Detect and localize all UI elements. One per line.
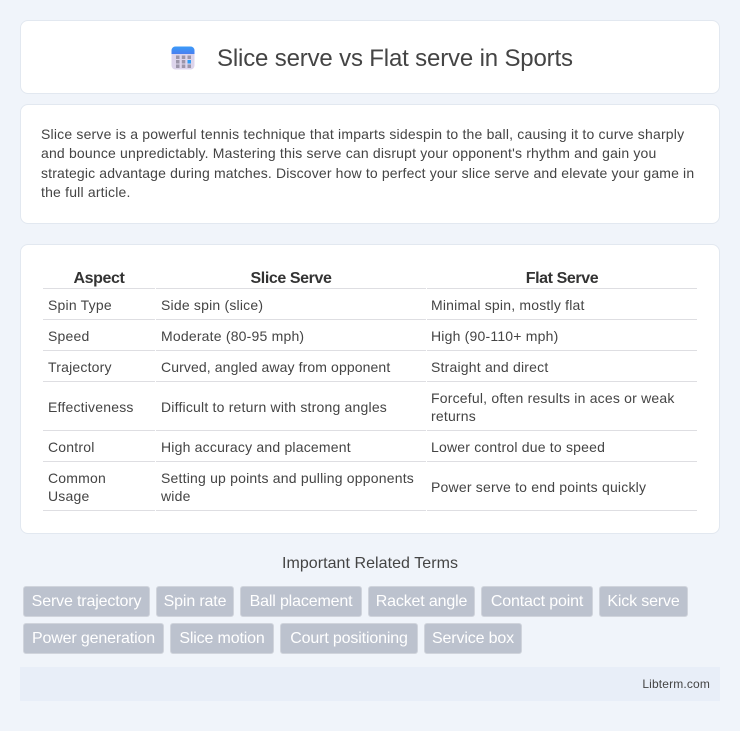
tags: related terms: Kick serve	[607, 593, 680, 610]
tags: related terms: Court positioning	[290, 630, 408, 647]
heading: related terms: Important Related Terms	[282, 555, 458, 572]
title: Slice serve vs Flat serve in Sports	[217, 45, 573, 72]
tags: related terms	[23, 586, 688, 654]
row: common usage: Power serve to end points quickly	[431, 479, 646, 495]
panel: comparison table	[20, 244, 720, 534]
row: spin type	[48, 297, 585, 313]
row: trajectory: Straight and direct	[431, 359, 548, 375]
panel: title card	[20, 20, 720, 94]
row: control: High accuracy and placement	[161, 439, 351, 455]
row: speed: High (90-110+ mph)	[431, 328, 558, 344]
row: control: Lower control due to speed	[431, 439, 605, 455]
tags: related terms: Ball placement	[250, 593, 352, 610]
row: common usage: wide	[161, 488, 191, 504]
row: control	[48, 439, 605, 455]
table header: Aspect	[74, 270, 124, 287]
table header: Flat Serve	[526, 270, 598, 287]
row: common usage: Setting up points and pulling opponents	[161, 470, 414, 486]
row: common usage	[48, 470, 646, 504]
row: spin type: Minimal spin, mostly flat	[431, 297, 585, 313]
row: speed: Speed	[48, 328, 89, 344]
intro paragraph: strategic advantage during matches. Discover how to perfect your slice serve and elevate your game in	[41, 165, 694, 181]
footer	[20, 667, 720, 701]
row: common usage: Common	[48, 470, 106, 486]
table header: Slice Serve	[250, 270, 332, 287]
row: effectiveness: returns	[431, 408, 476, 424]
row: trajectory: Curved, angled away from opponent	[161, 359, 390, 375]
tags: related terms: Slice motion	[179, 630, 265, 647]
row: control: Control	[48, 439, 95, 455]
tags: related terms: Spin rate	[164, 593, 226, 610]
intro paragraph: the full article.	[41, 184, 131, 200]
tags: related terms: Racket angle	[376, 593, 467, 610]
panel: intro text	[20, 104, 720, 224]
row: spin type: Spin Type	[48, 297, 112, 313]
intro paragraph	[41, 126, 694, 200]
footer credit: Libterm.com	[642, 677, 710, 691]
intro paragraph: Slice serve is a powerful tennis technique that imparts sidespin to the ball, causing it to curve sharply	[41, 126, 684, 142]
row: spin type: Side spin (slice)	[161, 297, 263, 313]
row: effectiveness: Difficult to return with strong angles	[161, 399, 387, 415]
row: trajectory	[48, 359, 548, 375]
row: common usage: Usage	[48, 488, 89, 504]
table header	[74, 270, 598, 287]
row: trajectory: Trajectory	[48, 359, 112, 375]
row: effectiveness	[48, 390, 675, 424]
row: effectiveness: Effectiveness	[48, 399, 134, 415]
tags: related terms: Power generation	[32, 630, 155, 647]
row: effectiveness: Forceful, often results in aces or weak	[431, 390, 675, 406]
tags: related terms: Serve trajectory	[32, 593, 141, 610]
row: speed	[48, 328, 558, 344]
tags: related terms: Contact point	[491, 593, 583, 610]
tags: related terms: Service box	[432, 630, 514, 647]
intro paragraph: and bounce unpredictably. Mastering this serve can disrupt your opponent's rhythm and gain you	[41, 145, 656, 161]
icon: calendar	[172, 46, 194, 70]
row: speed: Moderate (80-95 mph)	[161, 328, 304, 344]
